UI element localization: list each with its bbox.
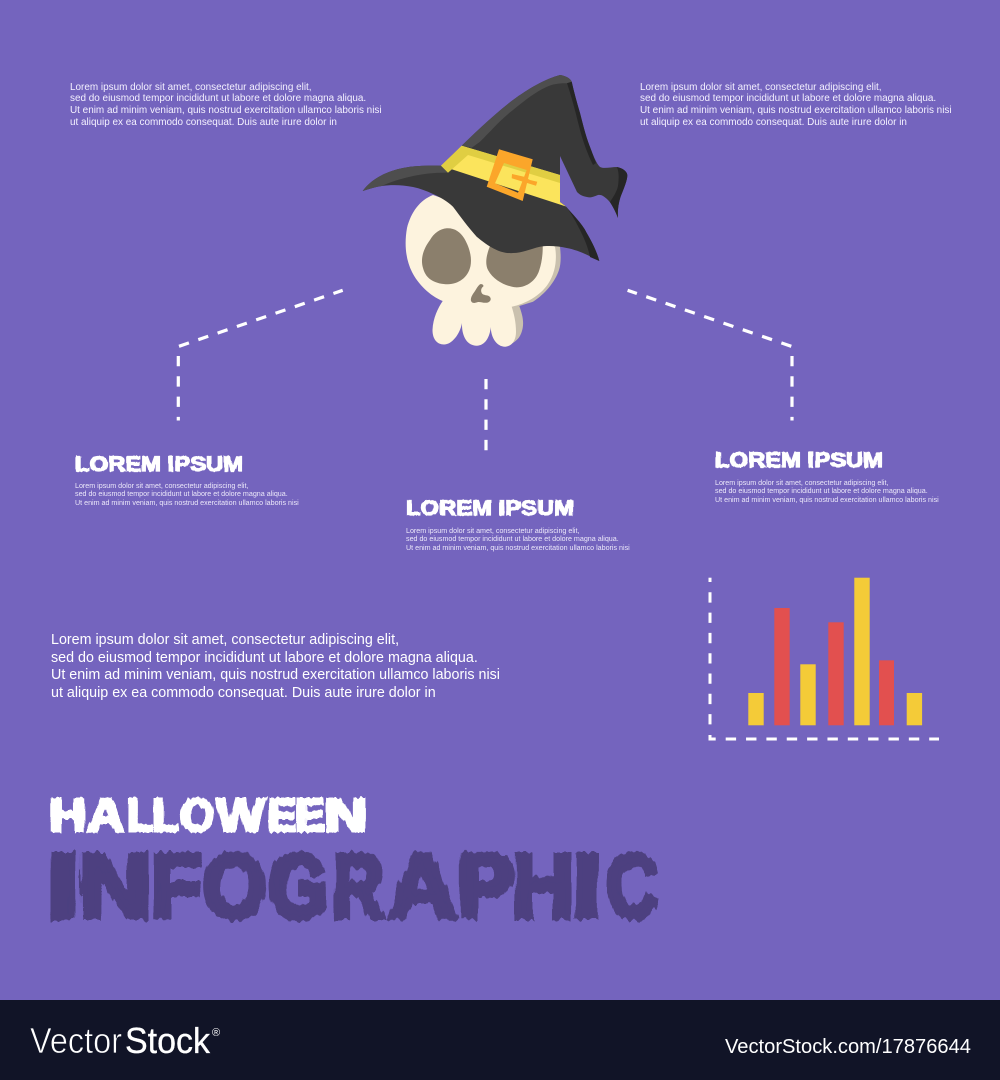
skull shadow (495, 240, 561, 347)
text block: large paragraph: ut aliquip ex ea commodo consequat. Duis aute irure dolor in (51, 684, 436, 700)
bar 4 (828, 622, 844, 725)
text block: right column body: Lorem ipsum dolor sit amet, consectetur adipiscing elit, (715, 478, 888, 486)
skull eye right (486, 242, 543, 287)
text block: left column body (75, 482, 299, 507)
hat highlight brim (363, 166, 448, 191)
title: Infographic: R (332, 837, 384, 937)
title: Infographic: I (48, 837, 79, 937)
footer logo: Vector (30, 1020, 122, 1061)
title: Halloween: H (49, 789, 86, 841)
text block: top right: ut aliquip ex ea commodo consequat. Duis aute irure dolor in (640, 117, 907, 128)
text block: top left: Ut enim ad minim veniam, quis nostrud exercitation ullamco laboris nisi (70, 105, 382, 116)
bar 3 (800, 664, 816, 725)
icon: skull wearing witch hat (363, 75, 627, 347)
hat shade brim (566, 206, 599, 261)
heading: left: LOREM IPSUM (75, 453, 243, 476)
hat shade fold (610, 167, 627, 218)
text block: center column body: Ut enim ad minim veniam, quis nostrud exercitation ullamco laboris nisi (406, 544, 630, 552)
skull (406, 195, 556, 347)
footer logo: Stock (125, 1020, 211, 1061)
footer registered mark: ® (212, 1027, 220, 1039)
title: Halloween: N (324, 789, 367, 841)
dashed connector right (628, 290, 792, 420)
title: Halloween: A (87, 789, 125, 841)
chart y axis (710, 578, 716, 739)
heading: right: LOREM IPSUM (715, 449, 883, 472)
bar 7 (907, 693, 922, 725)
text block: top right (640, 82, 952, 128)
text block: right column body: Ut enim ad minim veniam, quis nostrud exercitation ullamco laboris nisi (715, 496, 939, 504)
bar 5 (854, 578, 870, 725)
bar 2 (774, 608, 790, 725)
title: Infographic: H (512, 837, 574, 937)
text block: right column body: sed do eiusmod tempor incididunt ut labore et dolore magna aliqua. (715, 487, 928, 495)
hat highlight crown (462, 75, 572, 148)
title: Infographic: A (389, 837, 456, 937)
title: Infographic: P (458, 837, 514, 937)
text block: top left (70, 82, 382, 128)
title: Halloween: L (152, 789, 179, 841)
title: Halloween: E (295, 789, 325, 841)
text block: large paragraph: Lorem ipsum dolor sit amet, consectetur adipiscing elit, (51, 632, 399, 648)
title: Halloween: E (268, 789, 296, 841)
text block: top right: Ut enim ad minim veniam, quis nostrud exercitation ullamco laboris nisi (640, 105, 952, 116)
heading: center: LOREM IPSUM (406, 497, 574, 520)
text block: top left: sed do eiusmod tempor incididunt ut labore et dolore magna aliqua. (70, 93, 366, 104)
text block: large paragraph: sed do eiusmod tempor incididunt ut labore et dolore magna aliqua. (51, 650, 478, 666)
hat band (441, 146, 566, 206)
footer bar (0, 1000, 1000, 1080)
hat band shadow (441, 146, 560, 183)
hat body (363, 75, 627, 261)
bar chart (710, 578, 939, 739)
bar 6 (879, 660, 894, 725)
text block: large paragraph: Ut enim ad minim veniam, quis nostrud exercitation ullamco laboris nisi (51, 667, 500, 683)
hat shade crown (567, 82, 596, 165)
footer image id: VectorStock.com/17876644 (725, 1036, 971, 1058)
text block: top left: Lorem ipsum dolor sit amet, consectetur adipiscing elit, (70, 82, 312, 92)
hat buckle (487, 149, 533, 201)
text block: center column body (406, 526, 630, 552)
title: Infographic: O (203, 837, 266, 937)
chart x axis (726, 738, 939, 740)
title: Halloween: W (216, 789, 266, 841)
text block: right column body (715, 478, 939, 504)
dashed connector center (484, 379, 488, 451)
title: Infographic: C (607, 837, 657, 937)
text block: top right: sed do eiusmod tempor incididunt ut labore et dolore magna aliqua. (640, 93, 936, 104)
text block: left column body: sed do eiusmod tempor incididunt ut labore et dolore magna aliqua. (75, 490, 288, 498)
title: Halloween: O (181, 789, 214, 841)
skull nose (471, 284, 491, 303)
title: Infographic: I (572, 837, 602, 937)
text block: left column body: Ut enim ad minim veniam, quis nostrud exercitation ullamco laboris nisi (75, 499, 299, 507)
title: Halloween: L (127, 789, 153, 841)
title: Infographic: N (78, 837, 152, 937)
title: Infographic: G (269, 837, 328, 937)
text block: center column body: sed do eiusmod tempor incididunt ut labore et dolore magna aliqua. (406, 535, 619, 543)
dashed connector left (178, 290, 343, 420)
text block: center column body: Lorem ipsum dolor sit amet, consectetur adipiscing elit, (406, 526, 579, 534)
hat buckle pin (512, 174, 537, 186)
text block: top left: ut aliquip ex ea commodo consequat. Duis aute irure dolor in (70, 117, 337, 128)
text block: large paragraph (51, 632, 500, 700)
bar 1 (748, 693, 764, 725)
title: Infographic: F (151, 837, 201, 937)
text block: left column body: Lorem ipsum dolor sit amet, consectetur adipiscing elit, (75, 482, 248, 490)
skull eye left (422, 228, 471, 284)
text block: top right: Lorem ipsum dolor sit amet, consectetur adipiscing elit, (640, 82, 882, 92)
